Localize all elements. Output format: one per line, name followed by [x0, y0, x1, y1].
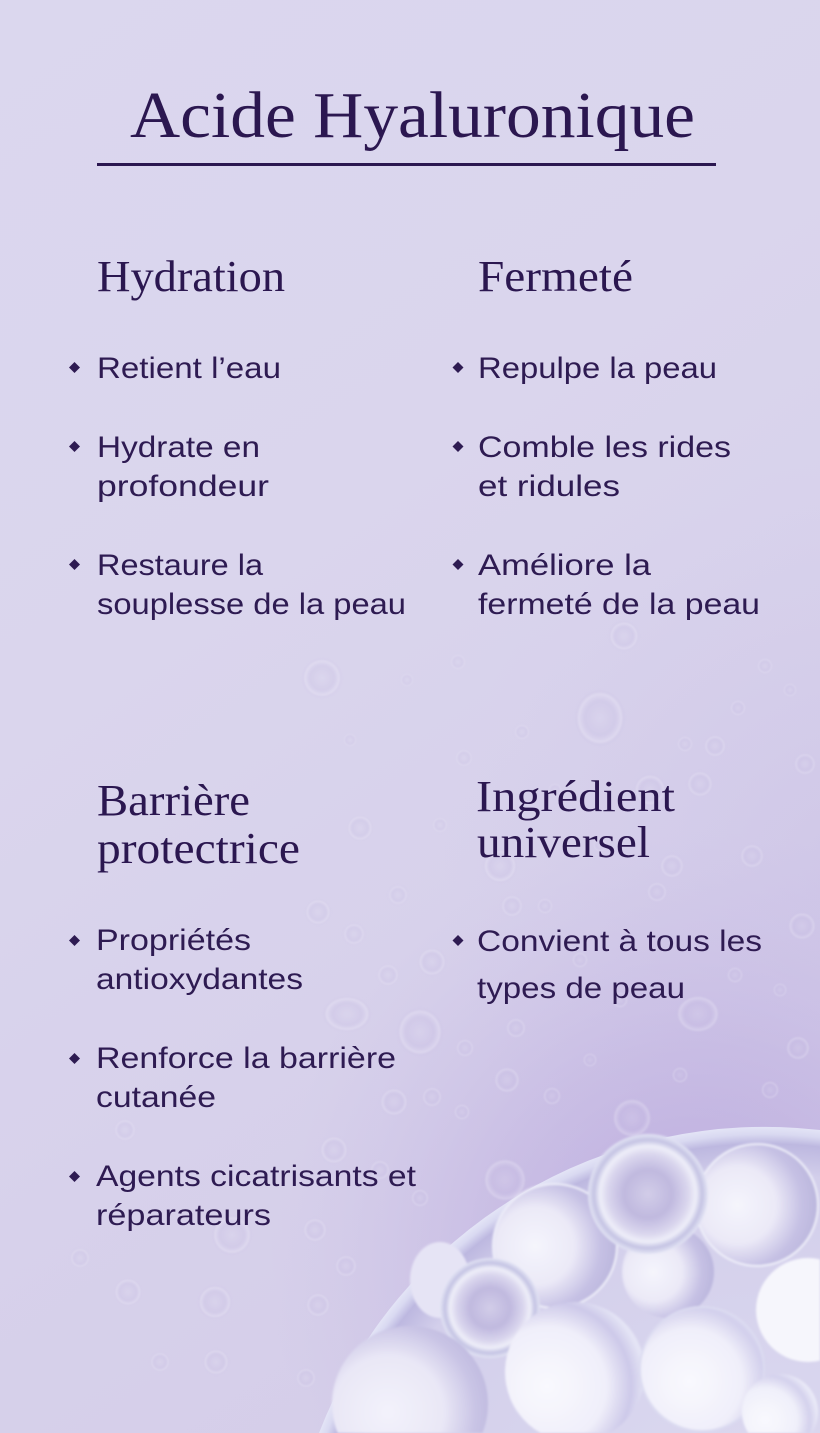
bullet list: [69, 924, 417, 1232]
sphere: ringed: [588, 1134, 708, 1254]
bullet list: réparateurs: [96, 1199, 271, 1232]
bullet list: [69, 352, 406, 621]
bullet list: [452, 352, 760, 621]
panel: Barrière protectrice: protectrice: [97, 824, 300, 873]
bullet list: Restaure la: [97, 549, 263, 582]
bullet list: Renforce la barrière: [96, 1042, 396, 1075]
bullet list: antioxydantes: [96, 963, 303, 996]
bullet list: Repulpe la peau: [478, 352, 717, 385]
bullet list: Agents cicatrisants et: [96, 1160, 417, 1193]
bullet list: Comble les rides: [478, 431, 731, 464]
hyaluronic spheres in a dome: [319, 1127, 820, 1433]
sphere: [332, 1326, 488, 1433]
bullet list: Retient l’eau: [97, 352, 281, 385]
sphere: [505, 1302, 645, 1433]
sphere: [742, 1374, 818, 1433]
panel: Barrière protectrice: Barrière: [97, 776, 250, 825]
sphere: [493, 1184, 617, 1308]
bullet list: cutanée: [96, 1081, 216, 1114]
sphere: [622, 1226, 714, 1318]
bullet list: [452, 925, 762, 1005]
panel: Hydration: Hydration: [97, 252, 285, 301]
bullet list: profondeur: [97, 470, 269, 503]
bullet list: fermeté de la peau: [478, 588, 760, 621]
bullet list: Améliore la: [478, 549, 651, 582]
panel: Ingrédient universel: [452, 772, 762, 1005]
panel: Fermeté: [452, 252, 760, 621]
bullet list: et ridules: [478, 470, 620, 503]
sphere: [410, 1242, 470, 1318]
bullet list: souplesse de la peau: [97, 588, 406, 621]
title: Acide Hyaluronique: [130, 79, 695, 152]
bullet list: Convient à tous les: [477, 925, 762, 958]
panel: Hydration: [69, 252, 406, 621]
bullet list: types de peau: [477, 972, 685, 1005]
sphere: [756, 1258, 820, 1362]
panel: Barrière protectrice: [69, 776, 417, 1232]
panel: Ingrédient universel: universel: [477, 818, 650, 867]
sphere: [696, 1144, 818, 1266]
sphere: [640, 1307, 764, 1431]
water droplets: [70, 621, 816, 1388]
panel: Ingrédient universel: Ingrédient: [476, 772, 675, 821]
bullet list: Propriétés: [96, 924, 251, 957]
sphere: ringed: [440, 1258, 540, 1358]
panel: Fermeté: Fermeté: [478, 252, 633, 301]
bullet list: Hydrate en: [97, 431, 260, 464]
